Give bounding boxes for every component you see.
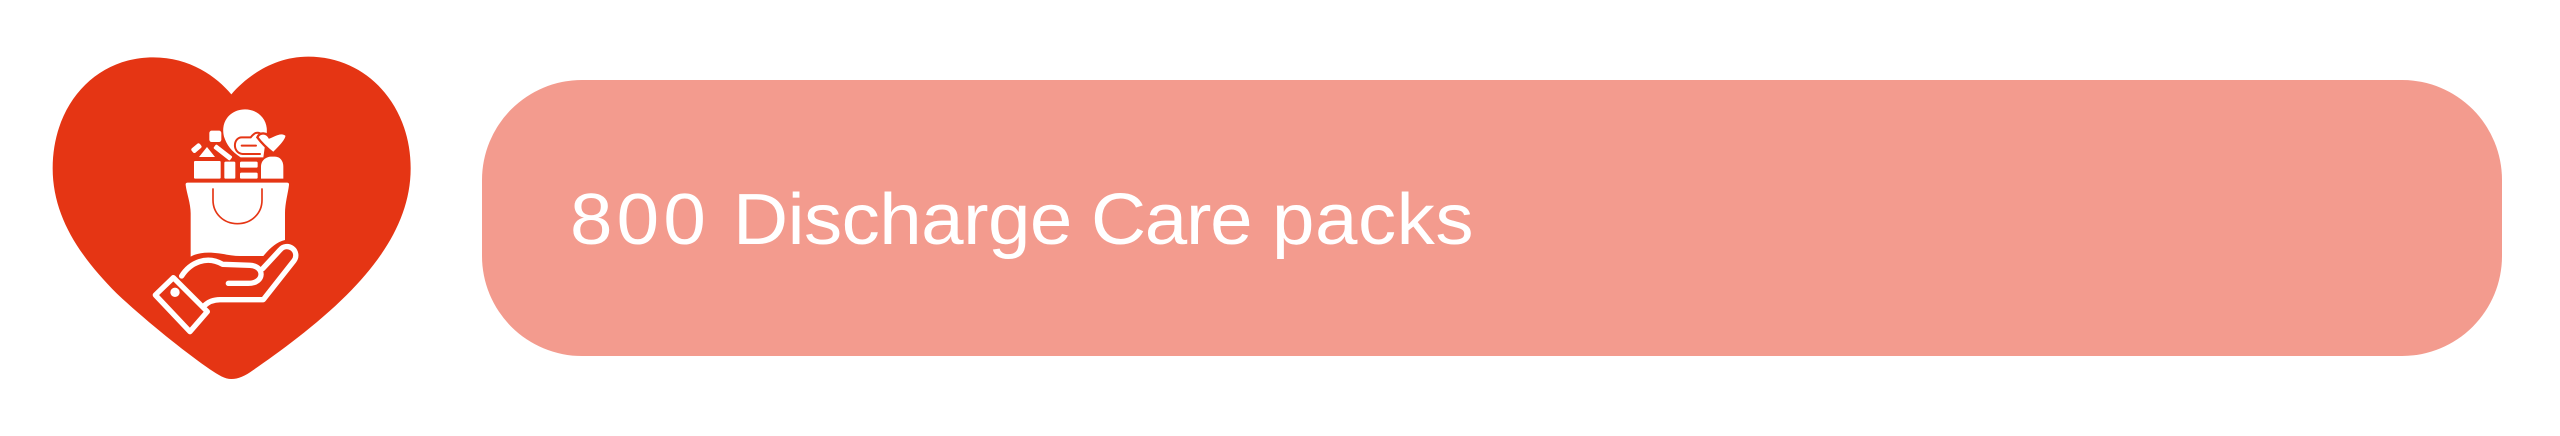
stat text: Discharge: [733, 179, 1072, 260]
icon: pack contents: [191, 109, 287, 179]
panel background: [482, 80, 2502, 356]
stat text: Care: [1091, 179, 1251, 260]
icon: care pack and hand: [155, 109, 296, 332]
stat text: packs: [1272, 179, 1474, 260]
heart shape: [53, 57, 411, 379]
icon: red heart with care pack: [53, 57, 411, 379]
stat text: 800: [570, 179, 710, 260]
icon: open hand: [155, 247, 296, 332]
panel: care packs: [482, 80, 2502, 356]
icon: gift bag: [186, 183, 289, 257]
